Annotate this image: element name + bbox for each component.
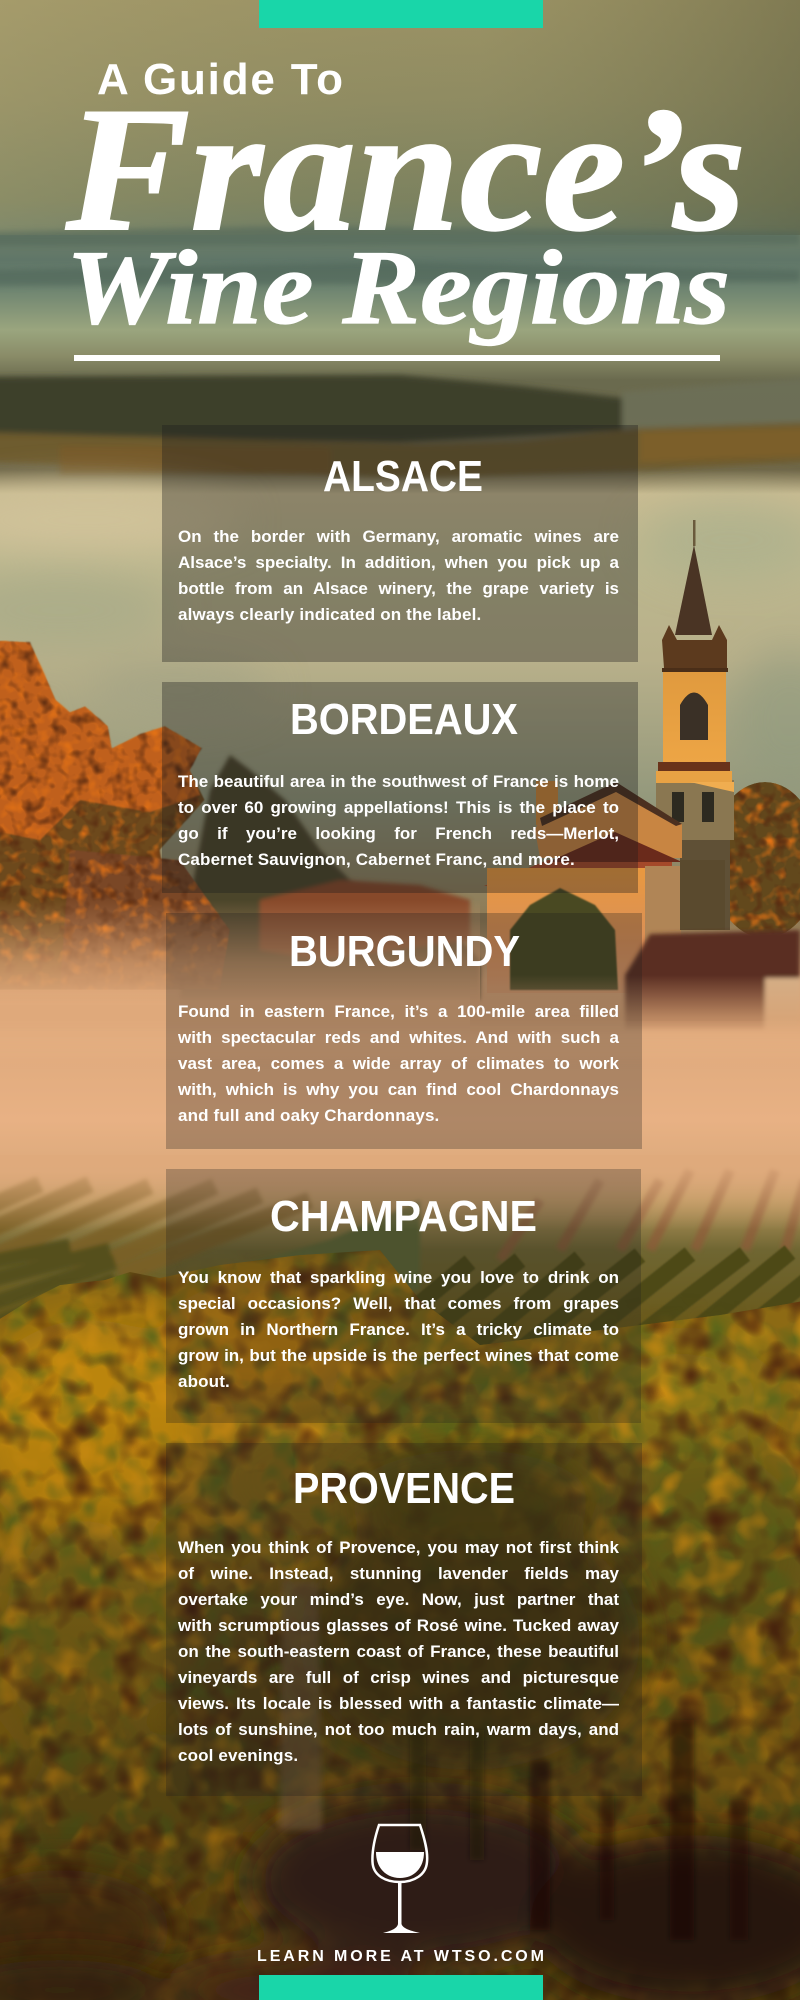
dark trees behind panel: [180, 755, 480, 1000]
text: Bordeaux description: The beautiful area in the southwest of France is home: [178, 772, 619, 791]
text: Provence description: cool evenings.: [178, 1746, 298, 1765]
panel: Bordeaux: [162, 682, 638, 893]
vineyard rows: [0, 1170, 800, 1325]
text: Provence description: overtake your mind’s eye. Now, just partner that: [178, 1590, 619, 1609]
text: Burgundy description: Found in eastern France, it’s a 100-mile area filled: [178, 1002, 619, 1021]
fog across the base of the village: [470, 975, 800, 1045]
text: Provence description: When you think of Provence, you may not first think: [178, 1538, 619, 1557]
title: [64, 55, 746, 361]
text: Bordeaux description: go if you’re looking for French reds—Merlot,: [178, 824, 619, 843]
title underline: [74, 355, 720, 361]
text: Burgundy description: vast area, comes a wide array of climates to work: [178, 1054, 619, 1073]
text: Alsace description: [178, 527, 620, 624]
text: Champagne description: about.: [178, 1372, 230, 1391]
heading: Bordeaux: BORDEAUX: [290, 695, 518, 744]
text: Provence description: lots of sunshine, not too much rain, warm days, and: [178, 1720, 619, 1739]
text: Champagne description: You know that sparkling wine you love to drink on: [178, 1268, 619, 1287]
text: Provence description: of wine. Instead, stunning lavender fields may: [178, 1564, 619, 1583]
text: Burgundy description: with spectacular reds and whites. And with such a: [178, 1028, 619, 1047]
panel: Alsace: [162, 425, 638, 662]
text: Provence description: on the south-eastern coast of France, these beautiful: [178, 1642, 619, 1661]
heading: Alsace: ALSACE: [323, 452, 483, 501]
title line: A Guide To: A Guide To: [97, 55, 343, 104]
text: Bordeaux description: to over 60 growing appellations! This is the place to: [178, 798, 619, 817]
panel: Burgundy: [166, 913, 642, 1149]
bottom teal accent bar: [259, 1975, 543, 2000]
text: Provence description: views. Its locale is blessed with a fantastic climate—: [178, 1694, 619, 1713]
text: Alsace description: bottle from an Alsace winery, the grape variety is: [178, 579, 619, 598]
heading: Champagne: CHAMPAGNE: [270, 1192, 537, 1241]
title line: Wine Regions: Wine Regions: [66, 229, 730, 346]
panel: Provence: [166, 1443, 642, 1796]
text: Burgundy description: [178, 1002, 620, 1125]
trunks and dark soil: [0, 1795, 800, 2000]
title line: France's: France’s: [65, 70, 746, 268]
text: Champagne description: grow in, but the upside is the perfect wines that come: [178, 1346, 619, 1365]
text: Champagne description: grown in Northern France. It’s a tricky climate to: [178, 1320, 619, 1339]
text: Alsace description: Alsace’s specialty. In addition, when you pick up a: [178, 553, 619, 572]
text: Burgundy description: and full and oaky Chardonnays.: [178, 1106, 439, 1125]
text: Bordeaux description: Cabernet Sauvignon, Cabernet Franc, and more.: [178, 850, 575, 869]
text: Alsace description: always clearly indicated on the label.: [178, 605, 481, 624]
text: Provence description: with scrumptious glasses of Rosé wine. Tucked away: [178, 1616, 619, 1635]
text: Provence description: vineyards are full of crisp wines and picturesque: [178, 1668, 619, 1687]
fog over tree base: [0, 900, 480, 1005]
shaded centre of the vines: [0, 1450, 640, 1990]
panel: Champagne: [166, 1169, 641, 1423]
top teal accent bar: [259, 0, 543, 28]
text: Champagne description: [178, 1268, 619, 1391]
call to action text: LEARN MORE AT WTSO.COM: [257, 1948, 544, 1965]
text: Burgundy description: with, which is why you can find cool Chardonnays: [178, 1080, 619, 1099]
heading: Burgundy: BURGUNDY: [289, 927, 520, 976]
church tower and nave: [484, 520, 800, 993]
autumn vine leaves: [0, 1250, 800, 2000]
text: Bordeaux description: [178, 772, 619, 869]
autumn trees left: [0, 640, 230, 990]
text: Alsace description: On the border with Germany, aromatic wines are: [178, 527, 619, 546]
text: Provence description: [178, 1538, 619, 1765]
text: Champagne description: special occasions? Well, that comes from grapes: [178, 1294, 619, 1313]
fog fading the vine row tops: [0, 1155, 800, 1230]
distant forest: [0, 375, 800, 478]
heading: Provence: PROVENCE: [293, 1464, 515, 1513]
icon: wine glass: [371, 1824, 428, 1933]
